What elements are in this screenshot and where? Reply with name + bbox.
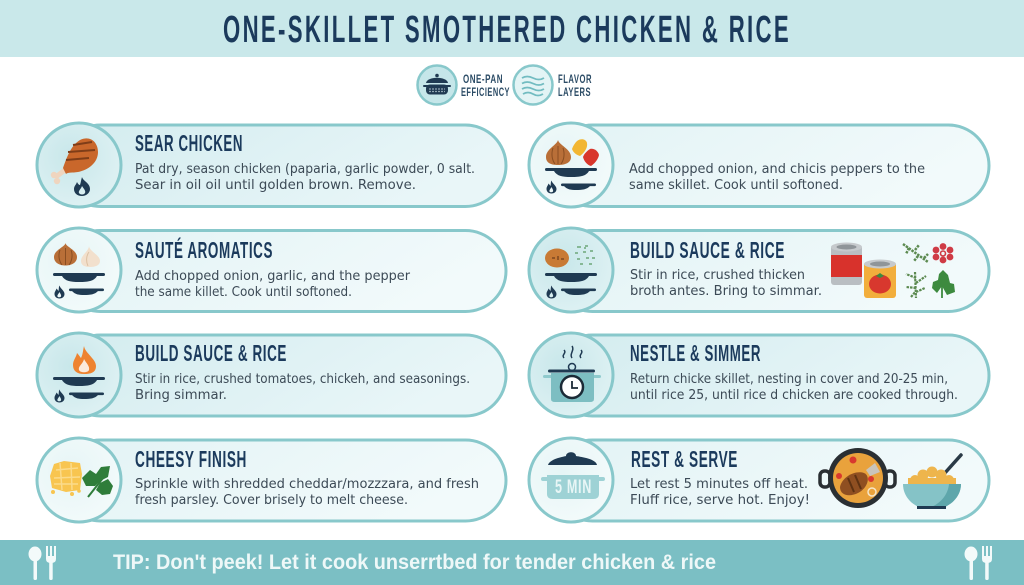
body text: the same killet. Cook until softoned. [135,284,352,300]
heading: NESTLE & SIMMER [630,340,761,366]
badge: one-pan efficiency [418,66,510,104]
icon: spoon and fork right [964,546,992,580]
body text [630,476,810,508]
icon: red tin can [831,242,862,285]
body text: Add chopped onion, and chicis peppers to the [629,161,925,177]
body text: Add chopped onion, garlic, and the pepper [135,268,410,284]
panel: saute aromatics [37,228,506,312]
body text: Bring simmar. [135,387,227,403]
heading: REST & SERVE [631,446,738,472]
panel: add onion and peppers [529,123,989,207]
body text: Sear in oil oil until golden brown. Remove. [135,177,416,193]
body text: Return chicke skillet, nesting in cover and 20-25 min, [630,371,948,387]
badge: flavor layers: FLAVOR [558,72,592,86]
icon: tomato can [864,260,896,298]
body text: same skillet. Cook until softoned. [629,177,843,193]
tip banner [0,540,1024,585]
body text [629,161,925,193]
heading: SAUTÉ AROMATICS [135,236,273,263]
body text: Sprinkle with shredded cheddar/mozzzara, and fresh [135,476,479,492]
icon: bowl of rice with spoon [903,455,961,509]
badge: flavor layers: LAYERS [558,85,591,99]
icon: onion, rice and pans [545,246,597,298]
icon: pot with lid and timer: 5 MIN [555,477,592,498]
icon: herbs [903,243,955,298]
icon: pot with steam and clock [543,346,601,402]
icon: shredded cheese and parsley [50,461,113,497]
icon: chicken drumstick with flame [51,138,98,196]
heading: CHEESY FINISH [135,446,247,472]
body text: Stir in rice, crushed tomatoes, chickeh, and seasonings. [135,371,470,387]
panel: nestle and simmer [529,333,989,417]
body text: until rice 25, until rice d chicken are cooked through. [630,387,958,403]
panel: sear chicken [37,123,506,207]
body text [135,371,470,403]
tip text: TIP: Don't peek! Let it cook unserrtbed for tender chicken & rice [113,551,716,574]
panel: rest and serve [529,438,989,522]
body text [135,476,479,508]
badge: one-pan efficiency: ONE-PAN [463,72,503,86]
body text [135,161,475,193]
body text: broth antes. Bring to simmar. [630,283,822,299]
badge: flavor layers [514,66,592,104]
body text: Stir in rice, crushed thicken [630,267,805,283]
panel: cheesy finish [37,438,506,522]
icon: onion, peppers and pans [545,139,599,194]
icon: skillet of chicken and rice [820,448,895,508]
body text [630,371,958,403]
badge: one-pan efficiency: EFFICIENCY [461,85,510,99]
icon: onion, garlic and pans [53,243,105,298]
header band [0,0,1024,57]
icon: spoon and fork left [28,546,56,580]
body text [630,267,822,299]
body text: Fluff rice, serve hot. Enjoy! [630,492,810,508]
heading: BUILD SAUCE & RICE [630,237,785,263]
panel: build sauce and rice (left) [37,333,506,417]
body text: Let rest 5 minutes off heat. [630,476,808,492]
body text: Pat dry, season chicken (paparia, garlic powder, 0 salt. [135,161,475,177]
icon: flame over pans [53,346,105,402]
panel: build sauce and rice (right) [529,228,989,312]
heading: BUILD SAUCE & RICE [135,340,287,366]
icon: pot with lid and timer [541,452,605,499]
body text [135,268,410,300]
heading: SEAR CHICKEN [135,130,243,156]
body text: fresh parsley. Cover brisely to melt cheese. [135,492,408,508]
